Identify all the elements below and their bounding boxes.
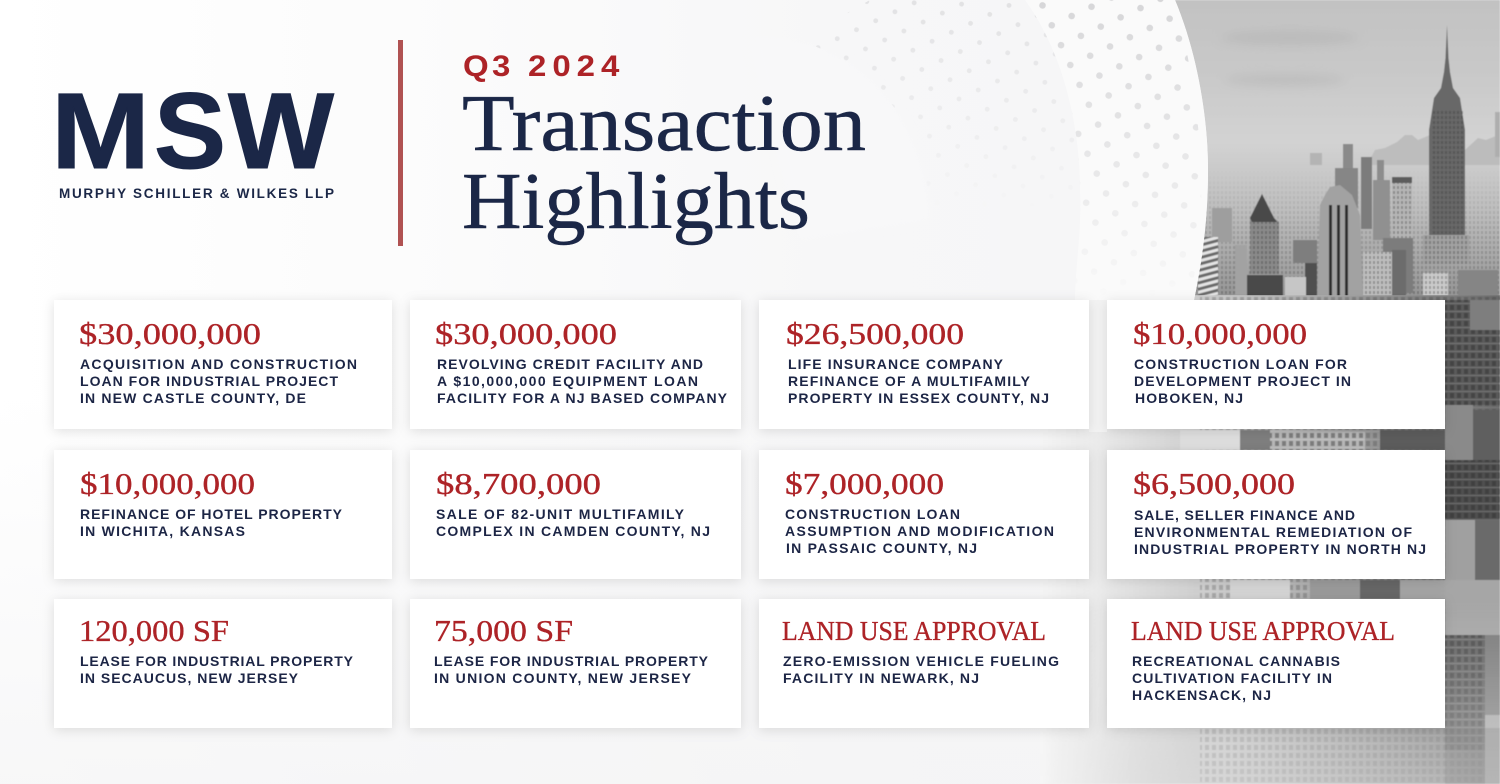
panel: land use approval Newark: [759, 599, 1089, 728]
panel: $10,000,000 Wichita: [54, 450, 392, 579]
panel: $8,700,000: [410, 450, 741, 579]
panel: land use approval Newark: ZERO-EMISSION VEHICLE FUELING: [783, 653, 1059, 669]
panel: $10,000,000 Wichita: REFINANCE OF HOTEL PROPERTY: [80, 506, 343, 522]
panel: $6,500,000: $6,500,000: [1133, 466, 1295, 501]
panel: $30,000,000 acquisition: $30,000,000: [79, 316, 261, 351]
skyline photo: [1150, 0, 1500, 300]
title: Highlights: [462, 158, 810, 246]
panel: $30,000,000 revolving credit: REVOLVING CREDIT FACILITY AND: [437, 356, 703, 372]
panel: 75,000 SF: IN UNION COUNTY, NEW JERSEY: [434, 670, 692, 686]
lower city photo: [1040, 295, 1500, 784]
panel: $8,700,000: SALE OF 82-UNIT MULTIFAMILY: [436, 506, 685, 522]
panel: $10,000,000 Hoboken: [1107, 300, 1445, 429]
panel: $6,500,000: [1107, 450, 1445, 579]
panel: land use approval Hackensack: CULTIVATION FACILITY IN: [1132, 670, 1332, 686]
panel: 120,000 SF: IN SECAUCUS, NEW JERSEY: [80, 670, 299, 686]
logo: MSW: [51, 70, 334, 201]
panel: land use approval Hackensack: HACKENSACK, NJ: [1132, 687, 1271, 703]
panel: $26,500,000: PROPERTY IN ESSEX COUNTY, NJ: [788, 390, 1049, 406]
eyebrow: Q3 2024: [463, 48, 620, 83]
panel: $10,000,000 Hoboken: HOBOKEN, NJ: [1135, 390, 1243, 406]
divider: [398, 40, 403, 246]
logo letters: M: [51, 70, 150, 191]
decorative curved panel with dots: [816, 0, 1208, 432]
panel: $10,000,000 Wichita: $10,000,000: [80, 466, 255, 501]
panel: $7,000,000: CONSTRUCTION LOAN: [785, 506, 960, 522]
panel: $30,000,000 acquisition: IN NEW CASTLE COUNTY, DE: [80, 390, 306, 406]
panel: land use approval Hackensack: LAND USE APPROVAL: [1131, 616, 1395, 646]
panel: land use approval Hackensack: RECREATIONAL CANNABIS: [1132, 653, 1340, 669]
panel: $7,000,000: IN PASSAIC COUNTY, NJ: [786, 540, 977, 556]
panel: $26,500,000: [759, 300, 1089, 429]
icon: Empire State Building: [1429, 25, 1465, 263]
panel: $30,000,000 revolving credit: [410, 300, 741, 429]
panel: $6,500,000: ENVIRONMENTAL REMEDIATION OF: [1134, 524, 1412, 540]
panel: $30,000,000 acquisition: ACQUISITION AND CONSTRUCTION: [80, 356, 357, 372]
title: [462, 80, 866, 246]
panel: $30,000,000 acquisition: LOAN FOR INDUSTRIAL PROJECT: [80, 373, 338, 389]
logo firm name: MURPHY SCHILLER & WILKES LLP: [59, 186, 334, 201]
panel: $30,000,000 revolving credit: A $10,000,000 EQUIPMENT LOAN: [437, 373, 698, 389]
panel: $7,000,000: $7,000,000: [785, 466, 944, 501]
panel: land use approval Hackensack: [1107, 599, 1445, 728]
panel: $7,000,000: ASSUMPTION AND MODIFICATION: [785, 523, 1054, 539]
panel: 120,000 SF: [54, 599, 392, 728]
panel: land use approval Newark: FACILITY IN NEWARK, NJ: [783, 670, 979, 686]
panel: 75,000 SF: [410, 599, 741, 728]
panel: $26,500,000: $26,500,000: [786, 316, 964, 351]
panel: $8,700,000: $8,700,000: [436, 466, 601, 501]
panel: $6,500,000: INDUSTRIAL PROPERTY IN NORTH NJ: [1134, 541, 1426, 557]
eyebrow: Q3 2024: 2024: [528, 48, 620, 83]
panel: $10,000,000 Hoboken: CONSTRUCTION LOAN FOR: [1134, 356, 1347, 372]
panel: $6,500,000: SALE, SELLER FINANCE AND: [1134, 507, 1355, 523]
logo letters: S: [154, 70, 226, 191]
panel: $30,000,000 revolving credit: $30,000,000: [435, 316, 617, 351]
panel: $30,000,000 revolving credit: FACILITY FOR A NJ BASED COMPANY: [437, 390, 728, 406]
panel: land use approval Newark: LAND USE APPROVAL: [782, 616, 1046, 646]
panel: $30,000,000 acquisition: [54, 300, 392, 429]
panel: $7,000,000: [759, 450, 1089, 579]
logo letters: [51, 70, 334, 191]
logo letters: W: [228, 70, 334, 191]
panel: $26,500,000: LIFE INSURANCE COMPANY: [788, 356, 1004, 372]
panel: $8,700,000: COMPLEX IN CAMDEN COUNTY, NJ: [436, 523, 710, 539]
title: Transaction: [462, 80, 866, 168]
panel: $10,000,000 Hoboken: DEVELOPMENT PROJECT IN: [1134, 373, 1351, 389]
panel: 120,000 SF: 120,000 SF: [79, 613, 229, 648]
panel: $10,000,000 Wichita: IN WICHITA, KANSAS: [80, 523, 245, 539]
eyebrow: Q3 2024: Q3: [463, 48, 510, 83]
central skyscraper: [1317, 185, 1363, 300]
panel: 75,000 SF: 75,000 SF: [434, 613, 573, 648]
panel: 75,000 SF: LEASE FOR INDUSTRIAL PROPERTY: [434, 653, 709, 669]
panel: 120,000 SF: LEASE FOR INDUSTRIAL PROPERTY: [80, 653, 354, 669]
panel: $10,000,000 Hoboken: $10,000,000: [1133, 316, 1307, 351]
panel: $26,500,000: REFINANCE OF A MULTIFAMILY: [788, 373, 1031, 389]
